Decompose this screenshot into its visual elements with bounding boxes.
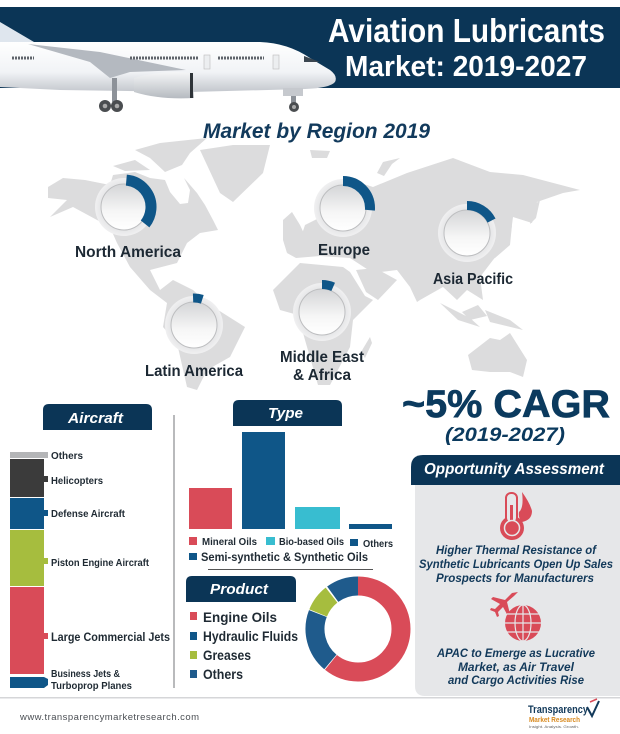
header band bbox=[0, 7, 620, 88]
text: thermal resistance: Higher Thermal Resistance of bbox=[436, 543, 597, 557]
stacked bar chart bbox=[10, 452, 48, 688]
label: Middle East and Africa: & Africa bbox=[293, 367, 351, 384]
donut: Middle East and Africa bbox=[293, 283, 351, 341]
text: thermal resistance: Synthetic Lubricants Open Up Sales bbox=[419, 557, 613, 571]
donut: Europe bbox=[314, 179, 372, 237]
icon: airplane bbox=[0, 22, 336, 112]
CAGR callout: (2019-2027) bbox=[445, 425, 565, 446]
label: Middle East and Africa bbox=[280, 349, 364, 384]
footer url: www.transparencymarketresearch.com bbox=[19, 712, 199, 723]
panel: aircraft bbox=[10, 404, 170, 692]
heading: aircraft: Aircraft bbox=[67, 410, 124, 427]
product legend: Engine Oils bbox=[203, 609, 277, 625]
aircraft legend labels bbox=[51, 450, 170, 692]
type legend bbox=[189, 536, 393, 564]
aircraft legend labels: Defense Aircraft bbox=[51, 508, 125, 520]
heading: market by region: Market by Region 2019 bbox=[203, 120, 430, 143]
label: Middle East and Africa: Middle East bbox=[280, 349, 364, 366]
text: APAC: and Cargo Activities Rise bbox=[448, 673, 584, 687]
text: APAC: Market, as Air Travel bbox=[458, 660, 575, 674]
logo: Market Research bbox=[529, 715, 580, 724]
title bbox=[328, 12, 605, 83]
aircraft legend labels: Business Jets & bbox=[51, 668, 120, 680]
heading: product: Product bbox=[210, 581, 269, 598]
aircraft legend labels: Turboprop Planes bbox=[51, 680, 132, 692]
text: thermal resistance bbox=[419, 543, 613, 585]
CAGR callout: ~5% CAGR bbox=[402, 383, 610, 426]
product legend: Hydraulic Fluids bbox=[203, 628, 298, 644]
panel: type bbox=[189, 400, 393, 564]
donut: Asia Pacific bbox=[438, 204, 496, 262]
donut: North America bbox=[95, 178, 153, 236]
aircraft legend labels: Large Commercial Jets bbox=[51, 632, 170, 644]
title: Market: 2019-2027 bbox=[345, 51, 587, 83]
heading: aircraft bbox=[43, 404, 152, 430]
heading: type: Type bbox=[268, 405, 303, 422]
panel: product bbox=[186, 568, 419, 690]
product legend: Others bbox=[203, 666, 243, 682]
panel: opportunity assessment bbox=[411, 455, 620, 696]
icon: thermometer and flame bbox=[500, 492, 532, 540]
aircraft legend labels: Others bbox=[51, 450, 83, 462]
text: APAC: APAC to Emerge as Lucrative bbox=[436, 646, 595, 660]
label: Asia Pacific: Asia Pacific bbox=[433, 271, 513, 288]
logo: Transparency bbox=[528, 704, 589, 716]
product legend bbox=[190, 609, 298, 682]
aircraft legend labels: Helicopters bbox=[51, 475, 103, 487]
heading: type bbox=[233, 400, 342, 426]
world map bbox=[48, 138, 580, 390]
logo: Insight. Analysis. Growth. bbox=[529, 725, 579, 729]
label: Latin America: Latin America bbox=[145, 363, 243, 380]
icon: plane and globe bbox=[490, 592, 541, 641]
aircraft legend labels: Piston Engine Aircraft bbox=[51, 557, 149, 569]
heading: opportunity assessment bbox=[411, 455, 620, 485]
bar chart bbox=[189, 432, 392, 529]
logo bbox=[528, 699, 599, 729]
product legend: Greases bbox=[203, 647, 251, 663]
text: thermal resistance: Prospects for Manufacturers bbox=[436, 571, 594, 585]
type legend: Semi-synthetic & Synthetic Oils bbox=[201, 552, 368, 564]
type legend: Others bbox=[363, 538, 393, 550]
type legend: Bio-based Oils bbox=[279, 536, 344, 548]
CAGR callout bbox=[402, 383, 610, 446]
heading: product bbox=[186, 576, 296, 602]
text: APAC bbox=[436, 646, 595, 687]
label: North America: North America bbox=[75, 244, 181, 261]
label: Europe: Europe bbox=[318, 242, 370, 259]
donut: Latin America bbox=[165, 296, 223, 354]
donut chart bbox=[297, 568, 419, 690]
heading: opportunity assessment: Opportunity Assessment bbox=[424, 461, 605, 478]
type legend: Mineral Oils bbox=[202, 536, 257, 548]
